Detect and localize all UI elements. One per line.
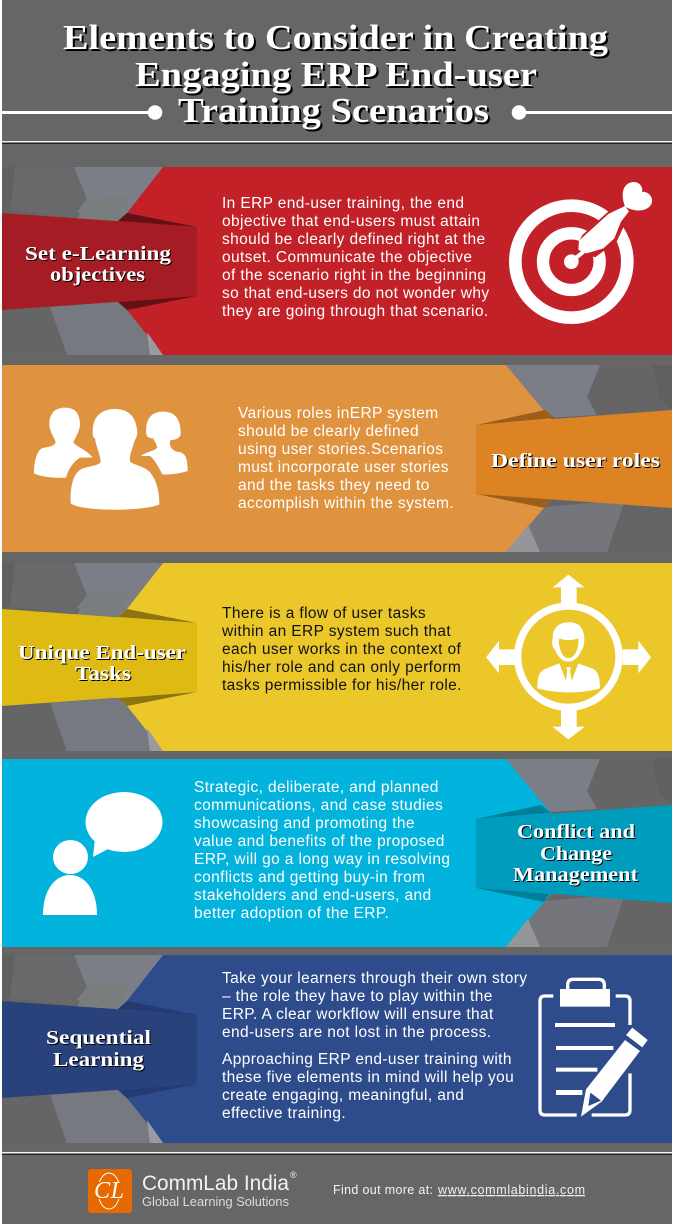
- text block: conflict and change management: communications, and case studies: [194, 797, 443, 814]
- ribbon: sequential learning: [2, 1001, 197, 1098]
- icon: person with speech bubble: [43, 792, 162, 915]
- logo: CommLab India: CommLab India: [142, 1172, 289, 1195]
- heading: conflict and change management: [513, 821, 638, 886]
- heading: conflict and change management: Management: [513, 864, 638, 886]
- panel: conflict and change management: [2, 759, 672, 947]
- text block: unique end-user tasks: within an ERP system such that: [221, 623, 451, 640]
- heading: sequential learning: [46, 1027, 152, 1071]
- logo: CommLab India: CL: [94, 1178, 124, 1204]
- text block: sequential learning: Take your learners through their own story: [222, 970, 527, 987]
- text block: conflict and change management: ERP, will go a long way in resolving: [194, 851, 450, 868]
- logo: CommLab India: Global Learning Solutions: [142, 1194, 289, 1209]
- text block: unique end-user tasks: tasks permissible for his/her role.: [222, 677, 462, 694]
- ribbon: set e-learning objectives: [2, 213, 197, 310]
- icon: target with dart: [515, 182, 652, 318]
- heading: set e-learning objectives: Set e-Learning: [25, 243, 171, 265]
- ribbon: unique end-user tasks: [2, 609, 197, 706]
- text block: sequential learning: – the role they have to play within the: [222, 988, 493, 1005]
- text block: conflict and change management: conflicts and getting buy-in from: [194, 869, 425, 886]
- panel: unique end-user tasks: [2, 563, 672, 751]
- text block: define user roles: and the tasks they need to: [238, 477, 430, 494]
- text block: define user roles: Various roles inERP system: [238, 405, 439, 422]
- text block: sequential learning: these five elements in mind will help you: [222, 1069, 514, 1086]
- heading: unique end-user tasks: Tasks: [75, 663, 131, 685]
- footer text: website link: www.commlabindia.com: [437, 1183, 585, 1197]
- text block: define user roles: using user stories.Scenarios: [238, 441, 443, 458]
- heading: unique end-user tasks: Unique End-user: [18, 642, 186, 664]
- heading: unique end-user tasks: [18, 642, 186, 685]
- footer text: website link: Find out more at:: [333, 1183, 433, 1197]
- title: Training Scenarios: [178, 91, 489, 130]
- text block: sequential learning: end-users are not lost in the process.: [222, 1024, 491, 1041]
- title: Engaging ERP End-user: [135, 55, 537, 94]
- heading: set e-learning objectives: objectives: [50, 264, 145, 286]
- text block: sequential learning: Approaching ERP end-user training with: [222, 1051, 512, 1068]
- heading: set e-learning objectives: [25, 243, 171, 286]
- heading: conflict and change management: Conflict and: [517, 821, 635, 843]
- panel: set e-learning objectives: [2, 167, 672, 355]
- icon: group of users: [34, 408, 188, 510]
- logo: CommLab India: ®: [290, 1170, 297, 1180]
- text block: conflict and change management: stakeholders and end-users, and: [194, 887, 432, 904]
- title: Elements to Consider in Creating: [63, 18, 609, 57]
- ribbon: conflict and change management: [476, 805, 672, 903]
- text block: sequential learning: create engaging, meaningful, and: [222, 1087, 464, 1104]
- text block: unique end-user tasks: his/her role and can only perform: [222, 659, 461, 676]
- text block: set e-learning objectives: outset. Communicate the objective: [222, 249, 472, 266]
- heading: sequential learning: Sequential: [46, 1027, 152, 1049]
- text block: conflict and change management: Strategic, deliberate, and planned: [194, 779, 439, 796]
- text block: set e-learning objectives: In ERP end-user training, the end: [222, 195, 464, 212]
- icon: clipboard and pencil: [540, 979, 648, 1117]
- text block: unique end-user tasks: each user works in the context of: [222, 641, 461, 658]
- text block: conflict and change management: better adoption of the ERP.: [194, 905, 389, 922]
- ribbon: define user roles: [476, 410, 672, 508]
- text block: set e-learning objectives: objective that end-users must attain: [222, 213, 480, 230]
- title: [63, 18, 609, 130]
- logo: CommLab India: [88, 1169, 297, 1213]
- text block: conflict and change management: showcasing and promoting the: [194, 815, 415, 832]
- text block: conflict and change management: value and benefits of the proposed: [194, 833, 445, 850]
- text block: set e-learning objectives: so that end-users do not wonder why: [222, 285, 489, 302]
- text block: sequential learning: effective training.: [222, 1105, 346, 1122]
- panel: sequential learning: [2, 955, 672, 1143]
- text block: set e-learning objectives: they are going through that scenario.: [222, 303, 489, 320]
- panel: define user roles: [2, 365, 672, 552]
- text block: sequential learning: ERP. A clear workflow will ensure that: [222, 1006, 494, 1023]
- icon: user with four arrows: [486, 575, 651, 739]
- heading: define user roles: Define user roles: [491, 450, 660, 472]
- text block: unique end-user tasks: There is a flow of user tasks: [222, 605, 426, 622]
- text block: set e-learning objectives: of the scenario right in the beginning: [222, 267, 486, 284]
- heading: conflict and change management: Change: [540, 843, 612, 865]
- text block: define user roles: accomplish within the system.: [238, 495, 454, 512]
- heading: sequential learning: Learning: [53, 1049, 144, 1071]
- text block: set e-learning objectives: should be clearly defined right at the: [222, 231, 485, 248]
- text block: define user roles: should be clearly defined: [238, 423, 419, 440]
- text block: define user roles: must incorporate user stories: [238, 459, 449, 476]
